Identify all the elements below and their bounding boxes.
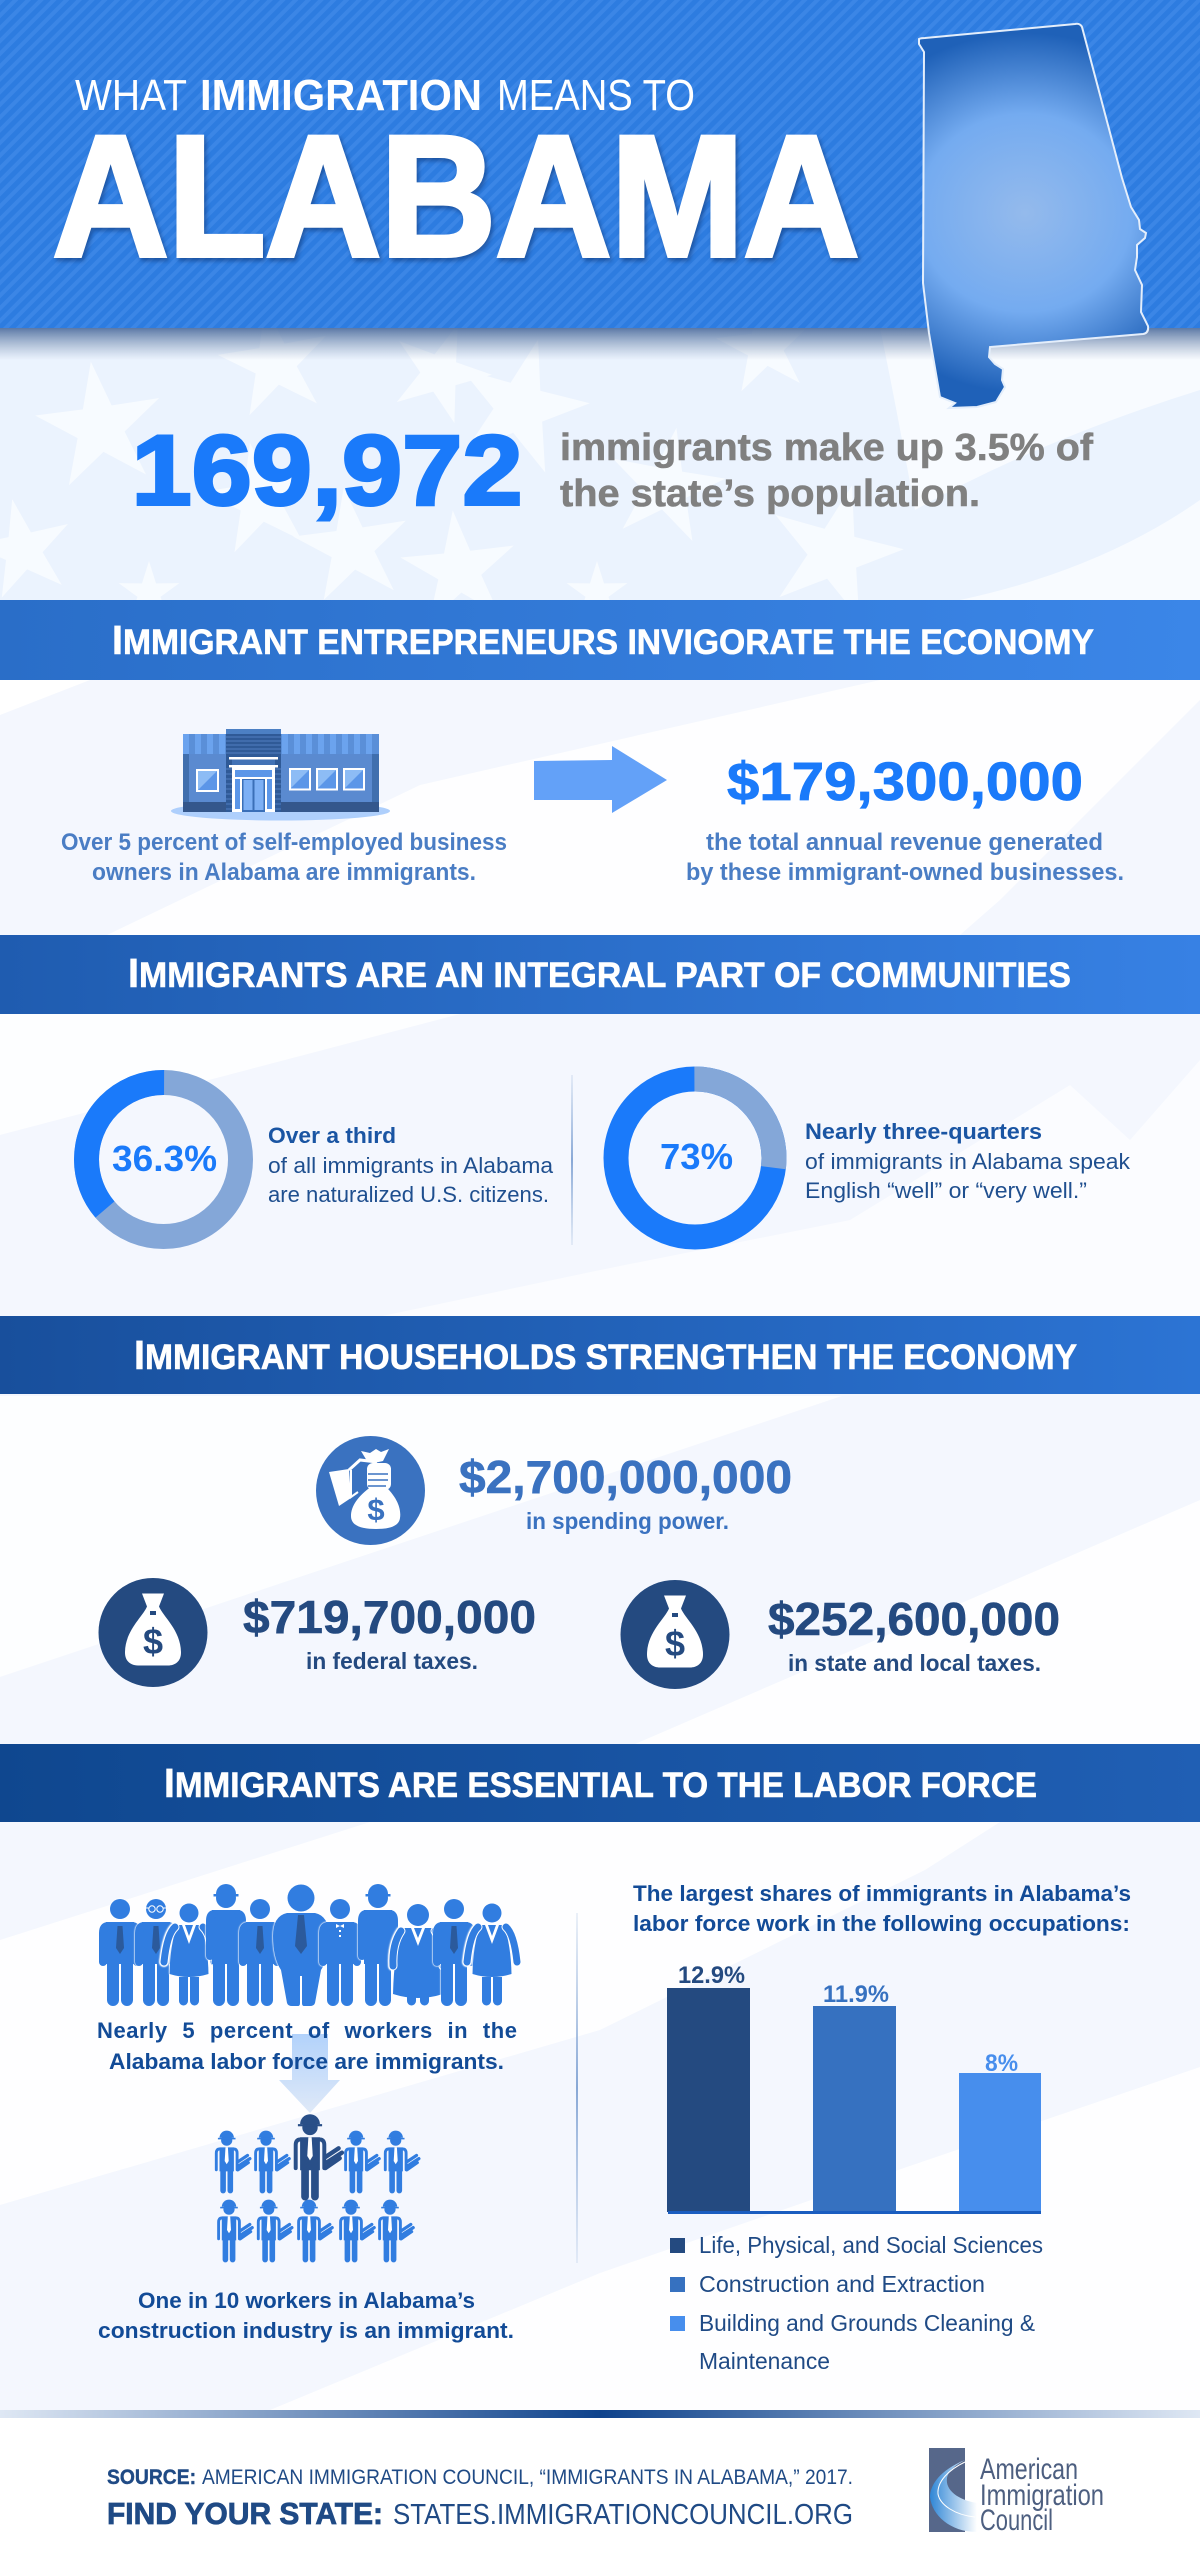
icon: crowd of workers bbox=[103, 1884, 517, 2006]
stat: 169,972 immigrants: immigrants make up 3.5% of bbox=[560, 427, 1093, 469]
section heading: households bbox=[0, 1316, 1200, 1394]
section heading: labor force bbox=[0, 1744, 1200, 1822]
bar chart: occupations: 12.9% bbox=[678, 1962, 745, 1989]
source line: AMERICAN IMMIGRATION COUNCIL, “IMMIGRANTS IN ALABAMA,” 2017. bbox=[202, 2466, 853, 2489]
state map: Alabama bbox=[919, 24, 1148, 408]
stat: 169,972 immigrants bbox=[132, 414, 1093, 526]
text: self-employed owners: owners in Alabama are immigrants. bbox=[92, 859, 476, 886]
icon: money bag state bbox=[620, 1580, 730, 1689]
stat: state and local taxes: in state and local taxes. bbox=[788, 1650, 1041, 1676]
donut chart: 73%: 73% bbox=[660, 1136, 733, 1177]
text: English ability: of immigrants in Alabama speak bbox=[805, 1149, 1131, 1174]
header band bbox=[0, 0, 1200, 360]
chart heading: The largest shares of immigrants in Alabama’s bbox=[633, 1881, 1131, 1906]
stat: revenue: by these immigrant-owned businesses. bbox=[686, 859, 1124, 886]
logo: American Immigration Council: American bbox=[980, 2453, 1078, 2486]
text: English ability: English “well” or “very well.” bbox=[805, 1178, 1087, 1203]
footer bbox=[0, 2410, 1200, 2566]
donut chart: 36.3%: 36.3% bbox=[112, 1138, 217, 1179]
title: IMMIGRATION bbox=[200, 71, 482, 120]
section heading: entrepreneurs: IMMIGRANT ENTREPRENEURS INVIGORATE THE ECONOMY bbox=[112, 617, 1094, 663]
stat: spending power: $2,700,000,000 bbox=[459, 1451, 792, 1503]
text: labor force share bbox=[97, 2018, 517, 2074]
stat: federal taxes: in federal taxes. bbox=[306, 1648, 478, 1674]
arrow bbox=[534, 746, 667, 813]
donut chart: 36.3% bbox=[86, 1082, 240, 1236]
text: naturalized citizens: are naturalized U.S. citizens. bbox=[268, 1182, 549, 1207]
chart heading: labor force work in the following occupations: bbox=[633, 1911, 1130, 1936]
legend: Maintenance bbox=[699, 2348, 830, 2374]
icon: hand holding money bag: $ bbox=[367, 1492, 385, 1527]
bar chart: occupations bbox=[667, 1962, 1041, 2214]
stat: 169,972 immigrants: the state’s population. bbox=[560, 473, 980, 515]
stat: spending power bbox=[459, 1451, 792, 1534]
section heading: communities: IMMIGRANTS ARE AN INTEGRAL PART OF COMMUNITIES bbox=[128, 950, 1071, 996]
find your state line: STATES.IMMIGRATIONCOUNCIL.ORG bbox=[393, 2499, 853, 2531]
stat: spending power: in spending power. bbox=[526, 1508, 729, 1534]
find your state line bbox=[107, 2496, 853, 2531]
legend: Life, Physical, and Social Sciences bbox=[699, 2232, 1043, 2258]
text: construction workers bbox=[98, 2288, 514, 2343]
text: naturalized citizens: of all immigrants in Alabama bbox=[268, 1153, 554, 1178]
section heading: communities bbox=[0, 935, 1200, 1014]
stat: 169,972 immigrants: 169,972 bbox=[132, 414, 522, 526]
icon: hand holding money bag bbox=[316, 1436, 425, 1545]
text: labor force share: Nearly 5 percent of workers in the bbox=[97, 2018, 517, 2043]
donut chart: 73% bbox=[616, 1079, 774, 1237]
legend: Building and Grounds Cleaning & bbox=[699, 2310, 1035, 2336]
stat: federal taxes bbox=[243, 1591, 536, 1674]
title: WHAT bbox=[75, 71, 187, 120]
stat: revenue: the total annual revenue generated bbox=[706, 829, 1103, 856]
stat: revenue bbox=[686, 752, 1124, 886]
text: self-employed owners bbox=[61, 829, 507, 886]
stat: state and local taxes bbox=[768, 1593, 1060, 1676]
section heading: labor force: IMMIGRANTS ARE ESSENTIAL TO THE LABOR FORCE bbox=[164, 1760, 1037, 1806]
find your state line: FIND YOUR STATE: bbox=[107, 2496, 383, 2531]
text: labor force share: Alabama labor force are immigrants. bbox=[109, 2049, 504, 2074]
hero background with stars bbox=[0, 291, 1200, 625]
text: naturalized citizens: Over a third bbox=[268, 1123, 396, 1148]
logo: American Immigration Council: Council bbox=[980, 2504, 1053, 2537]
stat: federal taxes: $719,700,000 bbox=[243, 1591, 536, 1643]
text: English ability: Nearly three-quarters bbox=[805, 1119, 1042, 1144]
bar chart: occupations: 11.9% bbox=[823, 1981, 889, 2008]
text: English ability bbox=[805, 1119, 1131, 1203]
background: white swooshes bbox=[0, 680, 1200, 2410]
bar chart: occupations: 8% bbox=[985, 2050, 1018, 2077]
text: construction workers: One in 10 workers in Alabama’s bbox=[138, 2288, 475, 2313]
stat: state and local taxes: $252,600,000 bbox=[768, 1593, 1060, 1645]
logo: American Immigration Council bbox=[929, 2448, 1104, 2537]
text: construction workers: construction industry is an immigrant. bbox=[98, 2318, 514, 2343]
section heading: entrepreneurs bbox=[0, 600, 1200, 680]
legend: Construction and Extraction bbox=[699, 2271, 985, 2297]
icon: money bag federal bbox=[98, 1578, 208, 1687]
stat: revenue: $179,300,000 bbox=[727, 752, 1083, 812]
icon: ten construction workers bbox=[216, 2114, 419, 2262]
chart heading bbox=[633, 1881, 1131, 1936]
legend bbox=[670, 2232, 1043, 2374]
icon: money bag federal: $ bbox=[143, 1621, 163, 1662]
title: ALABAMA bbox=[53, 100, 859, 292]
arrow: down bbox=[279, 2034, 340, 2113]
icon: storefront bbox=[171, 729, 390, 820]
text: naturalized citizens bbox=[268, 1123, 554, 1207]
source line: SOURCE: bbox=[107, 2466, 196, 2489]
logo: American Immigration Council: Immigration bbox=[980, 2479, 1104, 2512]
title: MEANS TO bbox=[497, 71, 695, 120]
section heading: households: IMMIGRANT HOUSEHOLDS STRENGTHEN THE ECONOMY bbox=[134, 1332, 1077, 1378]
icon: money bag state: $ bbox=[665, 1623, 685, 1664]
text: self-employed owners: Over 5 percent of self-employed business bbox=[61, 829, 507, 856]
